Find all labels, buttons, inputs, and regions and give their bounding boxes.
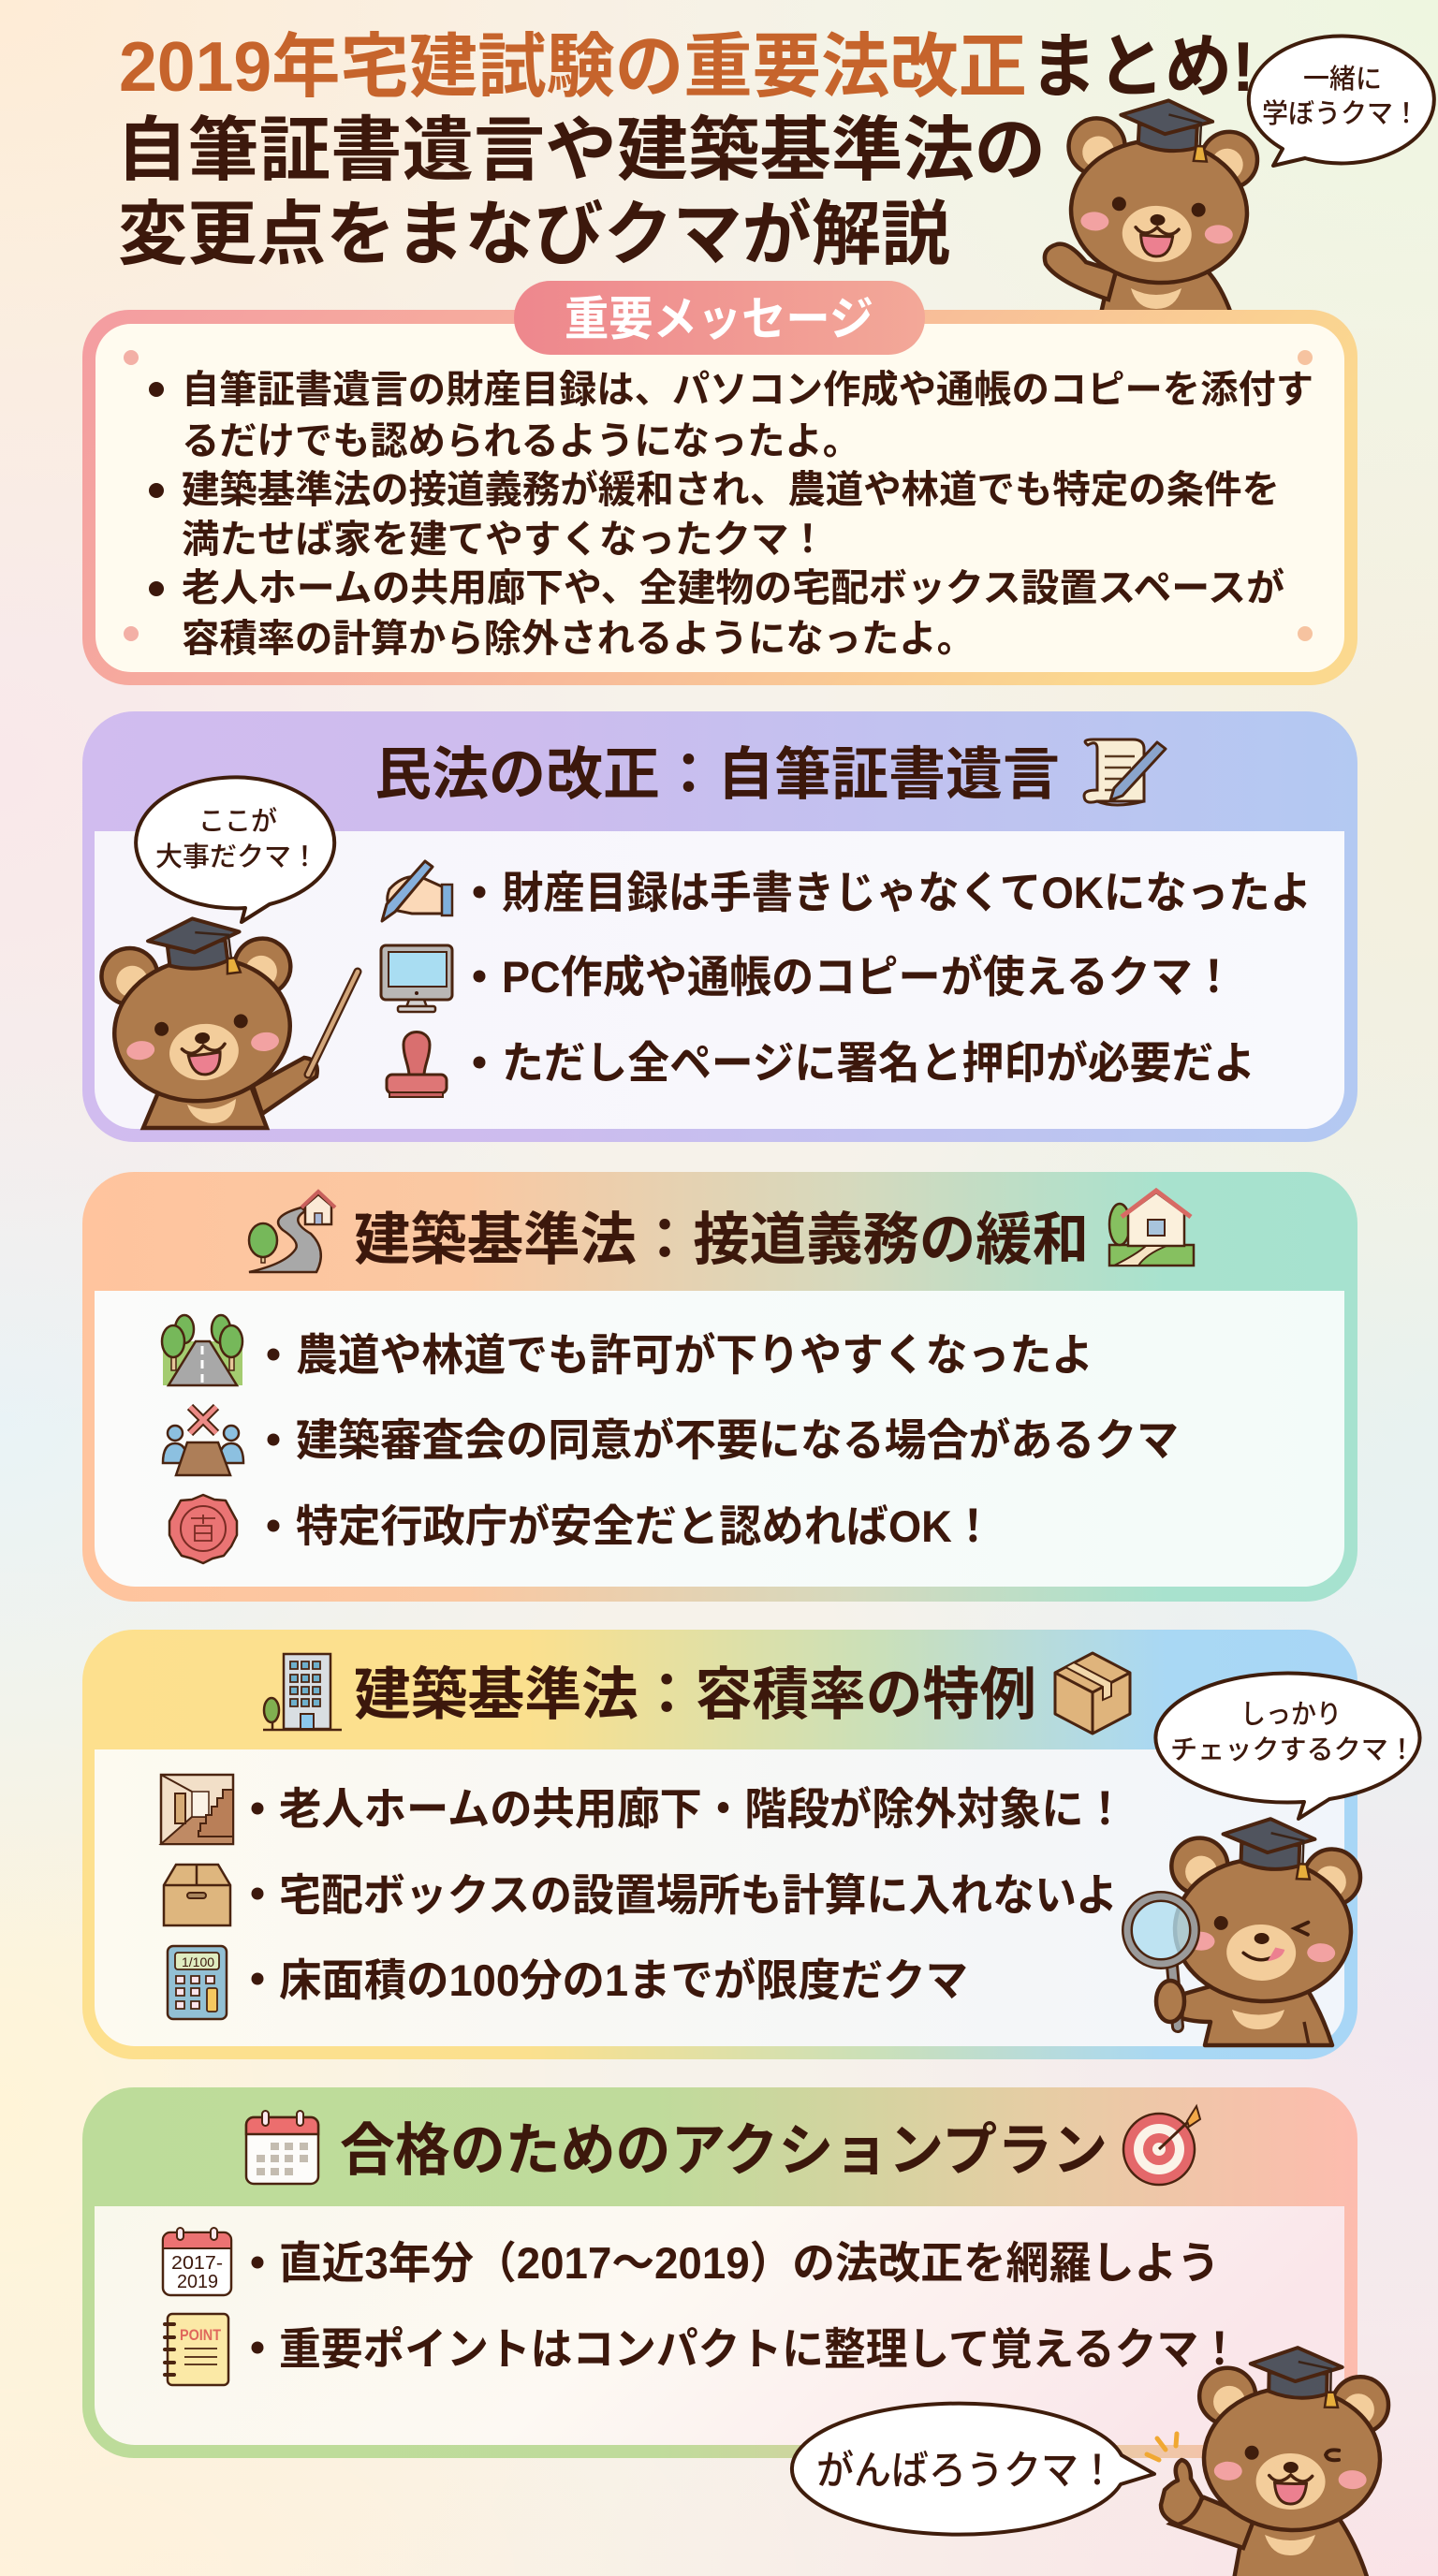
icon: farm road with trees — [162, 1315, 242, 1385]
icon: winding road to house — [249, 1192, 335, 1272]
heading: 建築基準法：容積率の特例 — [354, 1662, 1036, 1726]
speech bubble: しっかりチェックするクマ: しっかり — [1240, 1700, 1342, 1730]
message bullets: 満たせば家を建てやすくなったクマ！ — [182, 518, 827, 561]
title — [116, 27, 1255, 273]
bullets — [474, 868, 1312, 1088]
bullets: 財産目録は手書きじゃなくてOKになったよ — [502, 868, 1312, 917]
panel: road obligation — [82, 1172, 1357, 1602]
message bullets: 容積率の計算から除外されるようになったよ。 — [182, 617, 975, 660]
icon: meeting crossed out — [163, 1407, 243, 1475]
pill heading: 重要メッセージ — [514, 281, 925, 355]
icon: scroll and pen — [1084, 739, 1166, 805]
bullets: 建築審査会の同意が不要になる場合があるクマ — [296, 1415, 1179, 1465]
icon: calendar — [246, 2111, 318, 2184]
panel: action plan — [82, 2087, 1357, 2458]
bullets: 直近3年分（2017～2019）の法改正を網羅しよう — [279, 2238, 1220, 2288]
bullets — [251, 1784, 1126, 2005]
bear: thumbs up — [1147, 2346, 1389, 2576]
speech bubble: がんばろうクマ: がんばろうクマ！ — [816, 2449, 1116, 2494]
icon: target with arrow — [1123, 2106, 1200, 2185]
message bullets: 建築基準法の接道義務が緩和され、農道や林道でも特定の条件を — [182, 468, 1280, 511]
icon: cardboard box — [1055, 1653, 1130, 1734]
icon: calendar 2017-2019: 2017- — [171, 2253, 223, 2274]
title line 1: まとめ! — [1030, 27, 1255, 106]
speech bubble: 一緒に学ぼうクマ: 一緒に — [1303, 64, 1382, 95]
speech bubble: 一緒に学ぼうクマ: 学ぼうクマ！ — [1262, 98, 1419, 129]
bullets: PC作成や通帳のコピーが使えるクマ！ — [502, 952, 1235, 1002]
bear: pointing with stick — [95, 907, 358, 1128]
speech bubble: ここが大事だクマ — [136, 777, 334, 922]
heading: 民法の改正：自筆証書遺言 — [374, 742, 1060, 806]
heading: 合格のためのアクションプラン — [340, 2118, 1108, 2182]
speech bubble: ここが大事だクマ: 大事だクマ！ — [155, 842, 318, 872]
speech bubble: 一緒に学ぼうクマ — [1249, 36, 1434, 166]
title line 1: 2019年宅建試験の重要法改正 — [119, 27, 1027, 106]
sparks — [1147, 2434, 1177, 2460]
icon: calculator: 1/100 — [182, 1954, 214, 1969]
speech bubble: がんばろうクマ — [792, 2404, 1154, 2535]
bullets: 床面積の100分の1までが限度だクマ — [279, 1955, 968, 2005]
bullets: 老人ホームの共用廊下・階段が除外対象に！ — [279, 1784, 1126, 1834]
title line 2: 自筆証書遺言や建築基準法の — [116, 110, 1046, 189]
icon: point notebook — [165, 2314, 228, 2385]
icon: hand writing — [382, 861, 452, 921]
bullets: ただし全ページに署名と押印が必要だよ — [502, 1038, 1255, 1088]
bullets — [268, 1330, 1179, 1551]
bullets: 宅配ボックスの設置場所も計算に入れないよ — [279, 1870, 1118, 1920]
icon: calculator — [168, 1946, 227, 2019]
message bullets: るだけでも認められるようになったよ。 — [182, 419, 860, 462]
icon: delivery box — [164, 1865, 230, 1925]
bear: with magnifying glass — [1127, 1816, 1362, 2045]
icon: building — [263, 1654, 342, 1730]
panel: floor area ratio — [82, 1630, 1419, 2059]
icon: calendar 2017-2019: 2019 — [177, 2272, 218, 2292]
icon: house with garden — [1109, 1191, 1194, 1266]
icon: hallway and stairs — [161, 1775, 233, 1844]
panel: key message — [82, 281, 1357, 685]
panel: civil law — [82, 711, 1357, 1142]
bullets — [251, 2238, 1240, 2374]
message bullets — [149, 368, 1313, 660]
pill heading: 重要メッセージ: 重要メッセージ — [565, 293, 873, 345]
heading: 建築基準法：接道義務の緩和 — [354, 1208, 1089, 1271]
bullets: 特定行政庁が安全だと認めればOK！ — [296, 1501, 994, 1551]
bullets: 重要ポイントはコンパクトに整理して覚えるクマ！ — [279, 2324, 1240, 2374]
message bullets: 老人ホームの共用廊下や、全建物の宅配ボックス設置スペースが — [182, 566, 1284, 609]
icon: wax seal — [169, 1495, 237, 1563]
icon: calendar 2017-2019 — [163, 2228, 231, 2295]
speech bubble: しっかりチェックするクマ: チェックするクマ！ — [1170, 1735, 1416, 1765]
title line 3: 変更点をまなびクマが解説 — [118, 195, 950, 273]
icon: stamp — [387, 1032, 447, 1097]
speech bubble: しっかりチェックするクマ — [1155, 1674, 1419, 1819]
message bullets: 自筆証書遺言の財産目録は、パソコン作成や通帳のコピーを添付す — [182, 368, 1313, 411]
speech bubble: ここが大事だクマ: ここが — [198, 806, 277, 837]
bear: waving with graduation cap — [1045, 95, 1260, 314]
icon: monitor — [381, 945, 452, 1012]
bullets: 農道や林道でも許可が下りやすくなったよ — [296, 1330, 1093, 1380]
icon: point notebook: POINT — [180, 2326, 222, 2344]
